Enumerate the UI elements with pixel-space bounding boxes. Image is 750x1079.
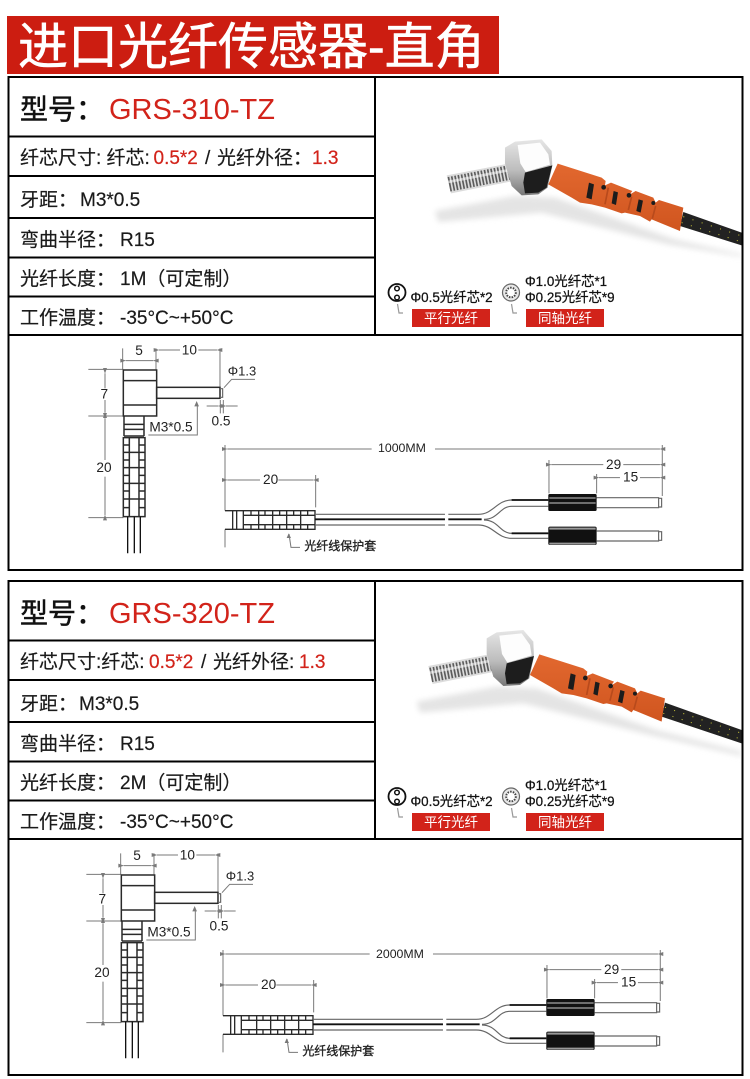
spec: fiber length: 2M（可定制） — [120, 772, 241, 794]
parallel fiber core label: Φ0.5光纤芯*2 — [410, 794, 493, 809]
model heading: GRS-320-TZ — [109, 598, 275, 630]
spec: fiber length: 1M（可定制） — [120, 268, 241, 290]
drawing: full length dimensions: 1000MM — [378, 441, 426, 455]
drawing: full length dimensions: 29 — [604, 962, 619, 977]
tag: parallel fiber: 平行光纤 — [424, 815, 478, 830]
drawing: full length dimensions: 15 — [623, 470, 639, 485]
drawing: full length dimensions — [223, 947, 660, 1058]
model heading: 型号： — [20, 598, 104, 629]
coaxial fiber core labels: Φ1.0光纤芯*1 — [525, 274, 607, 289]
drawing: side dimensions — [88, 342, 256, 553]
icon: coaxial fiber cross-section — [502, 284, 520, 313]
drawing: side dimensions: 0.5 — [211, 414, 231, 429]
spec: bend radius: 弯曲半径： — [20, 734, 115, 755]
panel: GRS-320-TZ — [8, 581, 743, 1075]
tag: coaxial fiber: 同轴光纤 — [538, 311, 592, 326]
drawing: full length dimensions: 20 — [263, 472, 279, 487]
panel: GRS-310-TZ — [8, 77, 743, 570]
parallel fiber core label: Φ0.5光纤芯*2 — [410, 290, 493, 305]
model heading — [20, 94, 275, 126]
drawing: full length dimensions: 20 — [261, 977, 277, 992]
model heading: GRS-310-TZ — [109, 94, 275, 126]
drawing: full length dimensions: 光纤线保护套 — [304, 539, 376, 553]
legend: parallel fiber — [388, 788, 493, 831]
spec: fiber core size: 1.3 — [312, 148, 338, 169]
spec: working temperature: 工作温度： — [20, 308, 115, 329]
spec: fiber core size: 1.3 — [299, 652, 325, 673]
drawing: side dimensions: Φ1.3 — [226, 869, 254, 884]
drawing: side dimensions: Φ1.3 — [228, 364, 256, 379]
spec: fiber core size: 纤芯尺寸: 纤芯: — [20, 148, 150, 169]
coaxial fiber core labels: Φ1.0光纤芯*1 — [525, 778, 607, 793]
product photo — [435, 139, 742, 257]
drawing: full length dimensions: 2000MM — [376, 947, 424, 961]
tag: coaxial fiber: 同轴光纤 — [538, 815, 592, 830]
spec: bend radius: 弯曲半径： — [20, 230, 115, 251]
spec: thread pitch: M3*0.5 — [79, 694, 139, 715]
drawing: side dimensions: 0.5 — [209, 919, 229, 934]
drawing: side dimensions: 10 — [182, 342, 197, 357]
spec: fiber core size: 0.5*2 — [154, 148, 198, 169]
legend: coaxial fiber — [502, 778, 615, 831]
drawing: side dimensions: 5 — [133, 848, 141, 863]
drawing: side dimensions: 20 — [96, 460, 112, 475]
legend: parallel fiber — [388, 284, 493, 327]
drawing: side dimensions: 7 — [99, 891, 106, 906]
legend: coaxial fiber — [502, 274, 615, 327]
spec: thread pitch: 牙距： — [20, 694, 77, 715]
spec: fiber core size: / — [205, 148, 211, 169]
spec: fiber core size: 光纤外径： — [217, 147, 312, 169]
drawing: side dimensions: 7 — [101, 386, 108, 401]
drawing: side dimensions: 20 — [94, 965, 110, 980]
drawing: side dimensions: 5 — [135, 343, 143, 358]
coaxial fiber core labels — [525, 274, 615, 305]
spec: working temperature: 工作温度： — [20, 812, 115, 833]
drawing: side dimensions: 10 — [180, 847, 195, 862]
drawing: full length dimensions: 29 — [606, 457, 621, 472]
coaxial fiber core labels — [525, 778, 615, 809]
spec: fiber length: 光纤长度： — [20, 269, 115, 290]
icon: coaxial fiber cross-section — [502, 788, 520, 817]
spec: fiber core size: 0.5*2 — [149, 652, 193, 673]
product photo — [417, 630, 742, 756]
spec: fiber core size: / — [201, 652, 207, 673]
spec: fiber length: 光纤长度： — [20, 773, 115, 794]
spec: working temperature: -35°C~+50°C — [120, 812, 233, 833]
spec: bend radius: R15 — [120, 230, 155, 251]
title banner: 进口光纤传感器-直角 — [18, 19, 485, 75]
drawing: side dimensions — [86, 847, 254, 1058]
spec: fiber core size: 光纤外径: — [213, 651, 294, 673]
spec: thread pitch: M3*0.5 — [80, 190, 140, 211]
spec: fiber core size: 纤芯尺寸:纤芯: — [20, 652, 145, 673]
model heading: 型号： — [20, 94, 104, 125]
spec: bend radius: R15 — [120, 734, 155, 755]
icon: parallel fiber cross-section — [388, 788, 406, 817]
drawing: side dimensions: M3*0.5 — [147, 925, 191, 940]
spec: thread pitch: 牙距： — [20, 190, 77, 211]
drawing: side dimensions: M3*0.5 — [149, 420, 193, 435]
coaxial fiber core labels: Φ0.25光纤芯*9 — [525, 794, 615, 809]
drawing: full length dimensions — [225, 441, 662, 553]
drawing: full length dimensions: 光纤线保护套 — [302, 1044, 374, 1058]
drawing: full length dimensions: 15 — [621, 975, 637, 990]
spec: working temperature: -35°C~+50°C — [120, 308, 233, 329]
tag: parallel fiber: 平行光纤 — [424, 311, 478, 326]
coaxial fiber core labels: Φ0.25光纤芯*9 — [525, 290, 615, 305]
model heading — [20, 598, 275, 630]
icon: parallel fiber cross-section — [388, 284, 406, 313]
